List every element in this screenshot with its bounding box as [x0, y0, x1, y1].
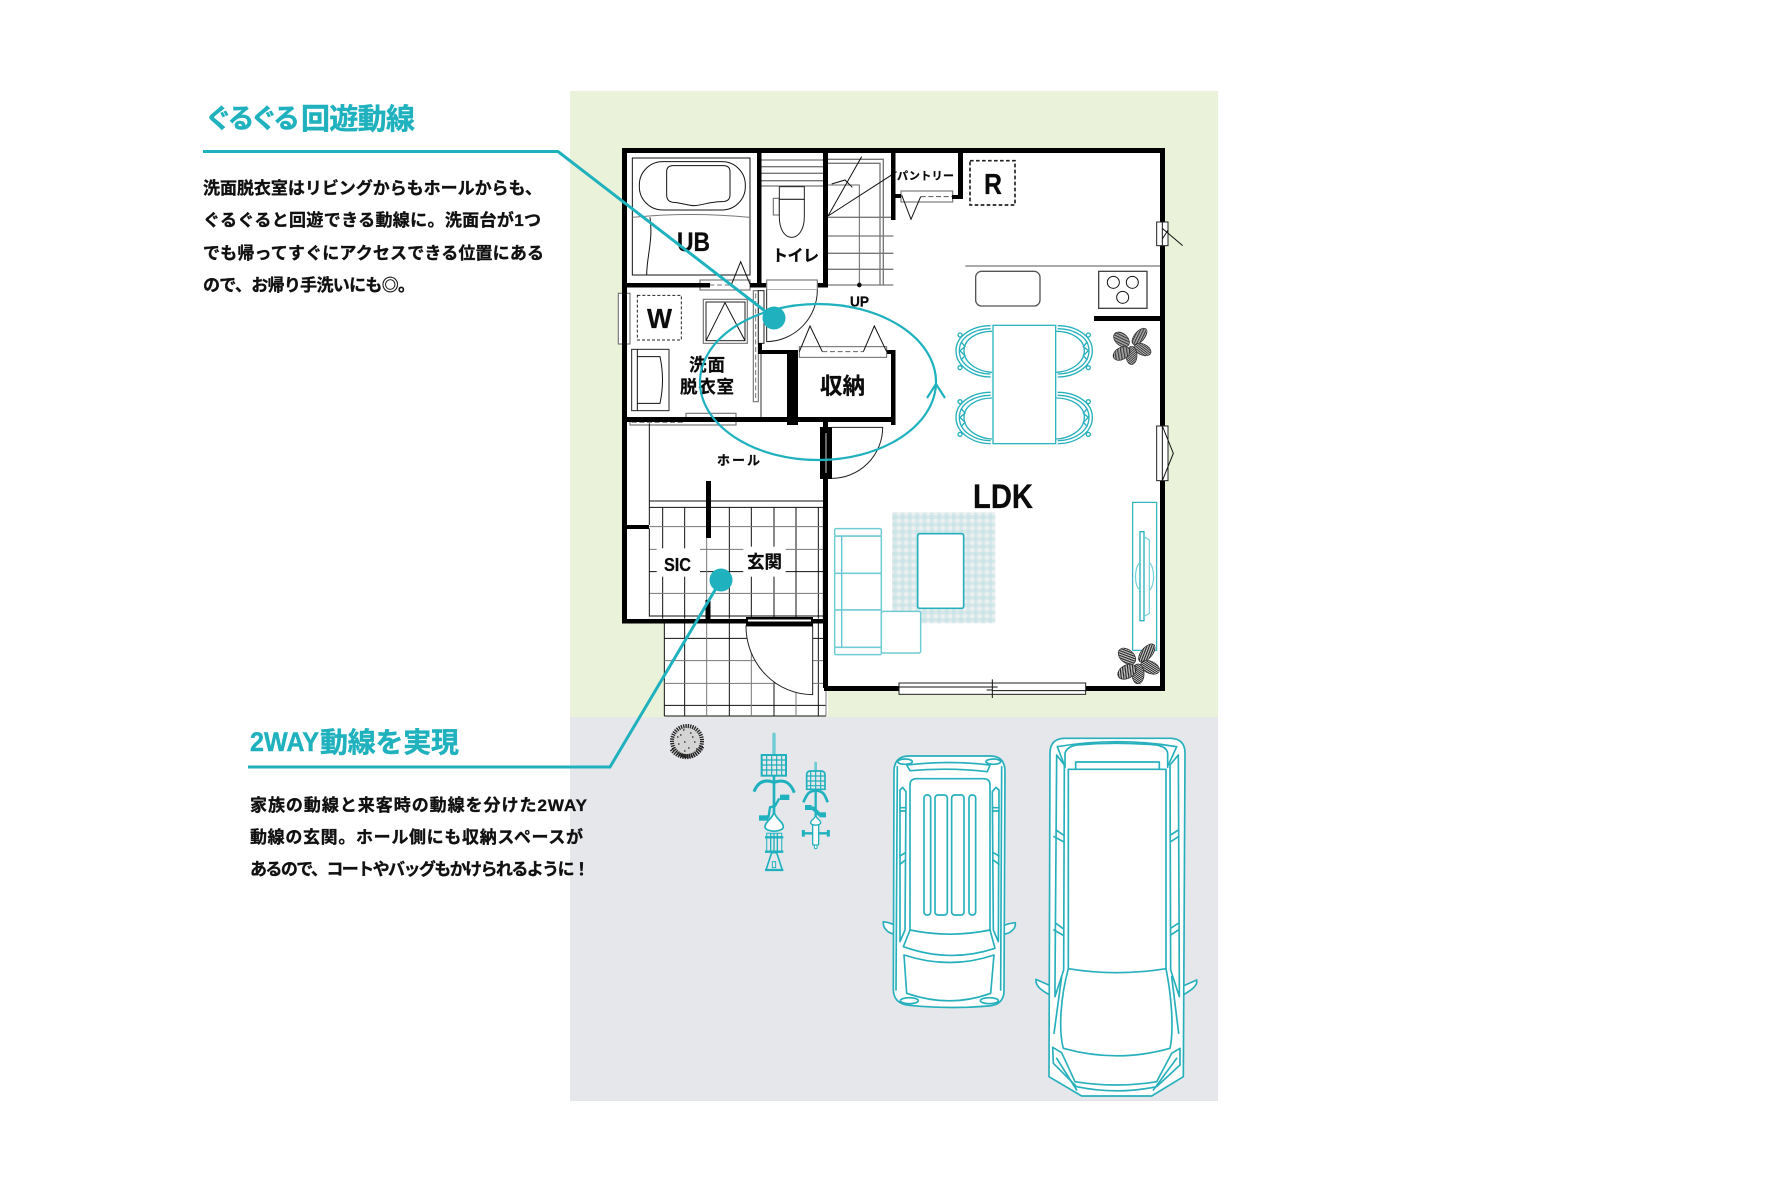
heading: circular route: ぐるぐる — [205, 104, 300, 134]
doors and windows — [767, 280, 887, 357]
car: left — [883, 756, 1015, 1008]
heading: circular route: 回遊動線 — [301, 103, 415, 136]
room labels — [647, 169, 1033, 575]
text block: 2WAY — [250, 795, 590, 879]
leader: circular route callout — [203, 152, 786, 330]
room labels: R — [984, 169, 1002, 201]
leader: 2WAY callout — [248, 568, 732, 767]
text block: circular route: 洗面脱衣室はリビングからもホールからも、 — [203, 178, 542, 198]
bicycle: small — [803, 762, 828, 849]
room labels: パントリー — [897, 170, 954, 182]
living: rug, sofa, table, tv — [835, 502, 1157, 655]
bicycle: large — [754, 733, 794, 870]
room: wash room fixtures — [618, 291, 764, 425]
plant: living corner — [1115, 641, 1162, 684]
room labels: W — [647, 303, 673, 334]
floor plan — [618, 148, 1183, 716]
bush — [672, 726, 702, 757]
text block: circular route — [203, 178, 544, 295]
windows: LDK — [899, 426, 1173, 698]
dining table and chairs — [956, 325, 1092, 444]
room labels: 脱衣室 — [680, 377, 734, 397]
car: right — [1036, 738, 1197, 1096]
house floor — [622, 148, 1165, 716]
heading: circular route — [205, 103, 415, 136]
room labels: UP — [850, 294, 869, 310]
room labels: SIC — [664, 555, 691, 575]
text block: circular route: ぐるぐると回遊できる動線に。洗面台が1つ — [203, 210, 541, 230]
room labels: 収納 — [820, 374, 865, 399]
text block: circular route: ので、お帰り手洗いにも◎。 — [203, 275, 415, 295]
text block: 2WAY: 家族の動線と来客時の動線を分けた2WAY — [250, 795, 588, 815]
walls — [622, 148, 1165, 691]
room labels: LDK — [973, 478, 1033, 516]
stairs — [828, 157, 897, 287]
door: hall to living — [832, 427, 883, 478]
heading: 2WAY: 動線を実現 — [320, 727, 459, 758]
room labels: 玄関 — [747, 552, 782, 572]
window: kitchen — [1157, 222, 1183, 246]
kitchen — [901, 161, 1160, 308]
flow line: circular route with arrow — [700, 304, 945, 460]
room labels: ホール — [717, 453, 760, 468]
room: toilet fixtures — [761, 160, 823, 237]
heading: 2WAY — [250, 727, 459, 758]
background: garden — [570, 91, 1218, 717]
plant: dining corner — [1111, 326, 1153, 364]
room labels: UB — [677, 227, 710, 257]
text block: circular route: でも帰ってすぐにアクセスできる位置にある — [203, 244, 544, 263]
text block: 2WAY: 動線の玄関。ホール側にも収納スペースが — [250, 827, 583, 847]
entrance tiles — [649, 423, 826, 716]
text block: 2WAY: あるので、コートやバッグもかけられるように！ — [250, 859, 590, 879]
heading: 2WAY: 2WAY — [250, 727, 319, 757]
room labels: トイレ — [772, 248, 819, 265]
room: bathroom fixtures — [632, 158, 750, 290]
background: parking area — [570, 717, 1218, 1101]
room labels: 洗面 — [689, 355, 725, 375]
